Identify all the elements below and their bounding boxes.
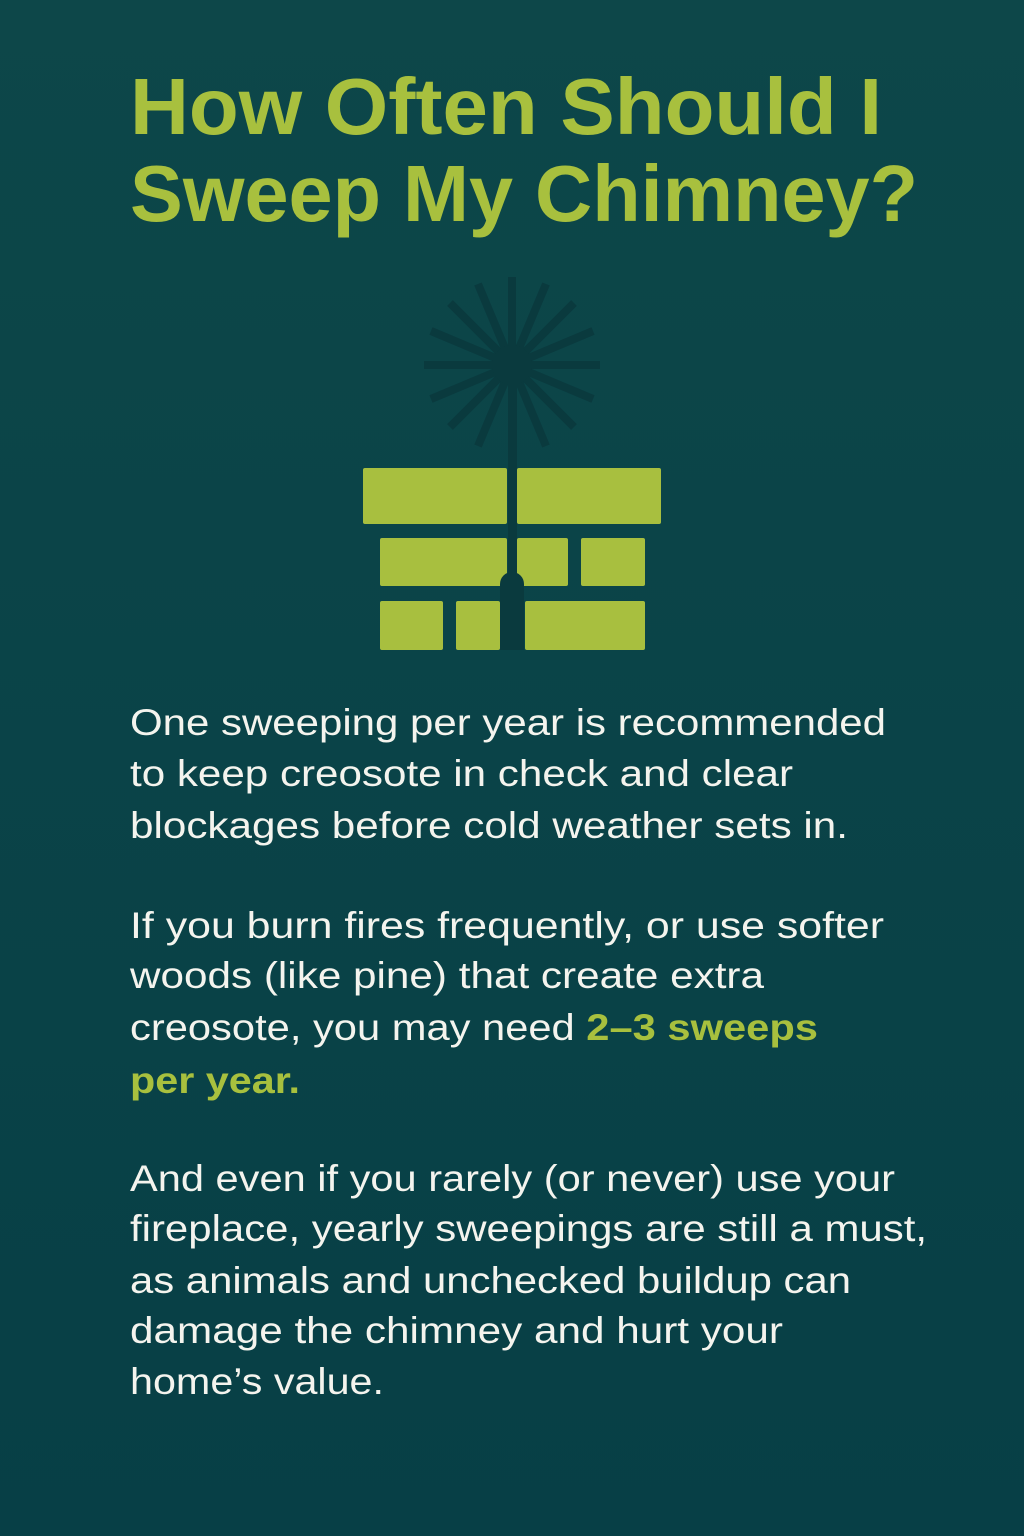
- icon: brush handle: [508, 365, 517, 580]
- text block: paragraph 2: woods (like pine) that create extra: [129, 955, 764, 996]
- text block: paragraph 2: creosote, you may need 2–3 sweeps: [130, 1007, 818, 1048]
- title: How Often Should I: [130, 62, 882, 151]
- icon: flue opening: [500, 572, 524, 650]
- icon: chimney with sweep brush: [363, 277, 661, 650]
- title: Sweep My Chimney?: [130, 149, 918, 238]
- text block: paragraph 3: And even if you rarely (or never) use your: [130, 1158, 895, 1199]
- text block: paragraph 3: damage the chimney and hurt your: [130, 1310, 783, 1351]
- text block: paragraph 1: to keep creosote in check and clear: [130, 753, 793, 794]
- text block: paragraph 2: per year.: [130, 1060, 300, 1101]
- text block: paragraph 3: home’s value.: [130, 1361, 384, 1402]
- text block: paragraph 3: [130, 1158, 927, 1402]
- text block: paragraph 2: [129, 905, 884, 1101]
- text block: paragraph 1: blockages before cold weather sets in.: [130, 805, 848, 846]
- text block: paragraph 3: as animals and unchecked buildup can: [130, 1260, 851, 1301]
- text block: paragraph 1: One sweeping per year is recommended: [130, 702, 886, 743]
- text block: paragraph 2: If you burn fires frequently, or use softer: [130, 905, 884, 946]
- title: [130, 62, 918, 238]
- icon: brush starburst: [424, 277, 600, 453]
- text block: paragraph 1: [130, 702, 886, 846]
- icon: bricks: [363, 468, 661, 650]
- text block: paragraph 3: fireplace, yearly sweepings are still a must,: [130, 1208, 927, 1249]
